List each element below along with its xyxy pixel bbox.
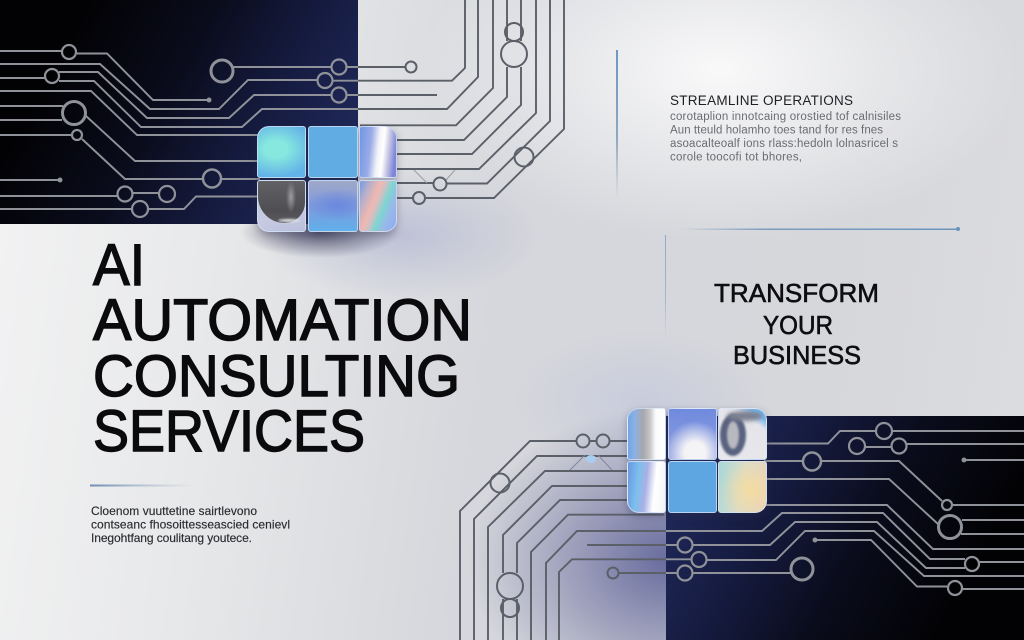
tile: pastel yellow <box>718 461 767 513</box>
streamline body text: Aun tteuld holamho toes tand for res fnes <box>670 124 883 136</box>
dark panel <box>0 0 358 224</box>
main title: AI <box>93 233 145 298</box>
tagline: YOUR <box>763 312 833 340</box>
tile: dark chrome blob <box>257 180 306 232</box>
divider: small vertical tick <box>665 235 666 340</box>
tile: mint <box>257 126 306 178</box>
streamline body text: corotaplion innotcaing orostied tof calnisiles <box>670 111 901 123</box>
circuit group: bottom-right, rotated copy <box>488 416 1024 640</box>
main title: SERVICES <box>93 399 365 464</box>
tile: rainbow <box>359 180 397 232</box>
blob highlight <box>278 219 300 222</box>
icon: glass cube top-left <box>253 125 402 238</box>
tile: chrome <box>627 408 666 460</box>
tile: periwinkle <box>308 180 358 232</box>
main title: AUTOMATION <box>93 288 472 353</box>
divider: right horizontal with dot <box>680 227 960 231</box>
loop ring <box>720 414 746 456</box>
circuit group: top-left <box>0 0 536 224</box>
tile: white glow <box>668 408 717 460</box>
circuit nodes <box>45 23 534 217</box>
left description text: Inegohtfang coulitang youtece. <box>91 531 252 545</box>
main title: CONSULTING <box>93 344 460 409</box>
blob <box>258 181 305 223</box>
icon: small iridescent spark <box>586 455 596 463</box>
circuit end dots <box>58 98 212 182</box>
streamline heading: STREAMLINE OPERATIONS <box>670 93 853 108</box>
traces and nodes beside bottom cube <box>460 434 629 640</box>
left description text <box>91 504 290 545</box>
traces and nodes beside top cube <box>395 0 564 204</box>
left description text: contseanc fhosoittesseascied cenievl <box>91 518 290 532</box>
streamline body text <box>670 111 901 164</box>
divider: left horizontal <box>90 484 195 486</box>
tile: iridescent white streak <box>359 126 397 178</box>
divider: right vertical <box>616 50 618 200</box>
tagline: BUSINESS <box>733 342 861 370</box>
main title <box>93 233 472 464</box>
tile: chrome loop <box>718 408 767 460</box>
streamline body text: corole toocofi tot bhores, <box>670 152 802 164</box>
streamline body text: asoacalteoalf ions rlass:hedoln lolnasricel s <box>670 138 898 150</box>
tagline: TRANSFORM <box>714 280 879 308</box>
circuit traces <box>0 0 536 209</box>
tile: blue <box>308 126 358 178</box>
icon: glass cube bottom-right <box>623 406 770 519</box>
loop swoosh <box>727 411 763 421</box>
left description text: Cloenom vuuttetine sairtlevono <box>91 504 257 518</box>
tile: white streak <box>627 461 666 513</box>
tile: blue <box>668 461 717 513</box>
tagline <box>714 280 879 370</box>
